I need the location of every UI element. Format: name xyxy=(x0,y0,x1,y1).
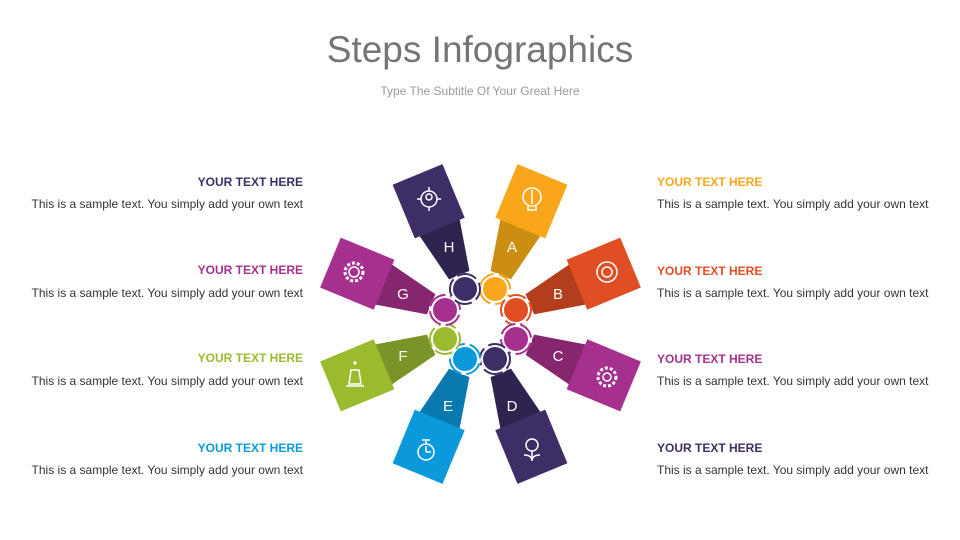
text block H: YOUR TEXT HERE xyxy=(198,175,303,189)
body B: This is a sample text. You simply add your own text xyxy=(657,286,928,300)
body D: This is a sample text. You simply add your own text xyxy=(657,463,928,477)
arm B: B xyxy=(553,286,563,303)
arm F xyxy=(320,308,470,411)
arm C xyxy=(491,308,641,411)
text block B: YOUR TEXT HERE xyxy=(657,264,762,278)
subtitle: Type The Subtitle Of Your Great Here xyxy=(380,84,580,98)
arm D xyxy=(464,334,567,484)
arm F: F xyxy=(398,348,408,365)
text block G: YOUR TEXT HERE xyxy=(198,263,303,277)
arm H: H xyxy=(444,239,454,256)
text block D: YOUR TEXT HERE xyxy=(657,441,762,455)
body C: This is a sample text. You simply add your own text xyxy=(657,374,928,388)
body F: This is a sample text. You simply add your own text xyxy=(32,374,303,388)
body E: This is a sample text. You simply add your own text xyxy=(32,463,303,477)
arm C: C xyxy=(553,348,564,365)
arm A: A xyxy=(507,239,517,256)
arm D: D xyxy=(507,398,518,415)
arm H xyxy=(393,164,496,314)
body H: This is a sample text. You simply add your own text xyxy=(32,197,303,211)
text block A: YOUR TEXT HERE xyxy=(657,175,762,189)
arm A xyxy=(464,164,567,314)
body A: This is a sample text. You simply add your own text xyxy=(657,197,928,211)
body G: This is a sample text. You simply add your own text xyxy=(32,286,303,300)
arm E: E xyxy=(443,398,453,415)
text block C: YOUR TEXT HERE xyxy=(657,352,762,366)
text block F: YOUR TEXT HERE xyxy=(198,351,303,365)
arm E xyxy=(393,334,496,484)
arm B xyxy=(491,238,641,341)
arm G xyxy=(320,238,470,341)
title: Steps Infographics xyxy=(327,29,633,70)
text block E: YOUR TEXT HERE xyxy=(198,441,303,455)
arm G: G xyxy=(397,286,409,303)
